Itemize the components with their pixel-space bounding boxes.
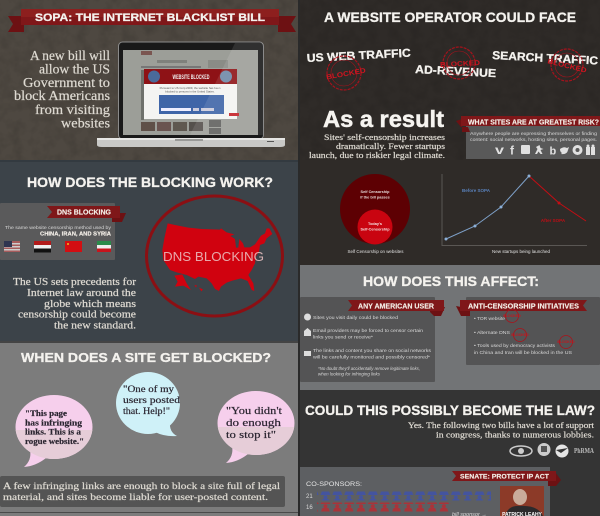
- callout: infringing links summary: material, and sites become liable for user-posted content.: [3, 492, 268, 503]
- panel: any American user: Sites you visit daily could be blocked: [313, 315, 398, 321]
- panel: DNS blocking: [0, 203, 126, 260]
- logos: lobby groups: [510, 443, 594, 458]
- text block: as a result: Sites' self-censorship increases: [324, 132, 445, 142]
- pictogram: 21 co-sponsors: [317, 492, 491, 500]
- intro text block: Government to: [23, 75, 110, 90]
- banner: any American user: [348, 300, 445, 316]
- text block: yes bills have support: Yes. The following two bills have a lot of support: [408, 420, 595, 430]
- panel: any American user: Email providers may be forced to censor certain: [313, 328, 423, 334]
- panel: operator risks background: [300, 0, 600, 265]
- text block: as a result: launch, due to riskier legal climate.: [309, 150, 445, 160]
- icons: social networks: f: [510, 144, 515, 158]
- panel: anti-censorship initiatives: • Alternate DNS: [474, 330, 510, 336]
- panel: anti-censorship initiatives: [456, 297, 600, 365]
- intro text block: websites: [61, 116, 110, 130]
- intro text block: A new bill will: [30, 48, 110, 63]
- panel: DNS blocking: CHINA, IRAN, AND SYRIA: [40, 232, 111, 238]
- panel: any American user: *No doubt they'll accidentally remove legitimate links,: [318, 366, 420, 371]
- chart: startups line chart: New startups being launched: [492, 249, 551, 254]
- speech bubble: didn't do enough: do enough: [226, 418, 282, 429]
- callout: infringing links summary: [0, 476, 285, 507]
- banner: anti-censorship initiatives: ANTI-CENSORSHIP INITIATIVES: [468, 302, 579, 310]
- laptop showing website blocked page: [97, 42, 285, 147]
- label: US web traffic with stamp: [307, 48, 411, 90]
- heading: website operator could face: A WEBSITE OPERATOR COULD FACE: [324, 9, 576, 25]
- title banner: SOPA: THE INTERNET BLACKLIST BILL: [35, 12, 265, 24]
- speech bubble: infringing links: "This page: [25, 408, 67, 418]
- heading: could this become law: COULD THIS POSSIBLY BECOME THE LAW?: [305, 402, 595, 418]
- text block: US sets precedents: globe which means: [44, 299, 136, 310]
- stamp: DNS blocked: BLOCKED: [511, 333, 529, 337]
- icons: social networks: b: [550, 146, 556, 158]
- label: US web traffic with stamp: US WEB TRAFFIC: [307, 48, 411, 65]
- chart: startups line chart: Before SOPA: [462, 188, 491, 193]
- panel: when blocked background: [0, 341, 300, 516]
- panel: intro background: [0, 0, 300, 161]
- speech bubble: users posted: "One of my: [123, 384, 174, 395]
- label: ad revenue with stamp: AD-REVENUE: [415, 64, 497, 80]
- text block: yes bills have support: [408, 420, 595, 440]
- panel: any American user: The links and content you share on social networks: [313, 348, 432, 354]
- title banner: [8, 9, 296, 32]
- heading: how does this affect: HOW DOES THIS AFFECT:: [363, 274, 539, 289]
- callout: infringing links summary: A few infringing links are enough to block a site full of legal: [3, 481, 280, 492]
- text block: as a result: As a result: [323, 106, 444, 132]
- stamp: tools blocked: BLOCKED: [557, 340, 575, 344]
- map: red United States in ring: [146, 196, 282, 316]
- panel: how blocking works background: [0, 161, 300, 341]
- stamp: TOR blocked: [503, 310, 521, 322]
- icons: social networks: [495, 143, 595, 158]
- panel: any American user: [300, 297, 445, 382]
- pictogram: 16 co-sponsors: [317, 502, 451, 512]
- icon: China flag: [65, 241, 82, 252]
- speech bubble: infringing links: links. This is a: [25, 426, 82, 436]
- intro text block: block Americans: [14, 88, 110, 103]
- intro text block: [14, 48, 110, 130]
- chart: self-censorship circles: [340, 174, 410, 254]
- panel: anti-censorship initiatives: • Tools used by democracy activists: [474, 343, 556, 349]
- banner: anti-censorship initiatives: [456, 300, 587, 316]
- panel: what sites are at greatest risk: Anywhere people are expressing themselves or finding: [470, 131, 598, 136]
- stamp: tools blocked: [557, 336, 575, 348]
- label: ad revenue with stamp: [415, 47, 497, 80]
- map: red United States in ring: DNS BLOCKING: [163, 249, 264, 264]
- speech bubble: didn't do enough: [218, 391, 294, 463]
- logos: lobby groups: PhRMA: [574, 447, 594, 455]
- speech bubble: users posted: [116, 372, 180, 436]
- speech bubble: users posted: that. Help!": [123, 407, 170, 417]
- speech bubble: infringing links: rogue website.": [25, 436, 84, 446]
- panel: what sites are at greatest risk: content: social networks, hosting sites, personal pages.: [470, 137, 597, 142]
- banner: senate protect IP act: SENATE: PROTECT IP ACT: [460, 474, 549, 480]
- panel: what sites are at greatest risk: WHAT SITES ARE AT GREATEST RISK?: [468, 120, 599, 126]
- panel: what sites are at greatest risk: [456, 116, 600, 159]
- panel: become law background: [300, 390, 600, 516]
- chart: startups line chart: After SOPA: [541, 218, 566, 223]
- speech bubble: infringing links: has infringing: [25, 418, 83, 428]
- label: search traffic with stamp: SEARCH TRAFFIC: [492, 50, 598, 68]
- panel: any American user: when looking for infringing links: [318, 372, 381, 376]
- panel: anti-censorship initiatives: in China and Iran will be blocked in the US: [474, 350, 572, 356]
- panel: any American user: will be carefully monitored and possibly censored*: [313, 354, 430, 360]
- text block: yes bills have support: in congress, thanks to numerous lobbies.: [436, 430, 594, 440]
- panel: senate protect IP act: 16: [306, 505, 313, 511]
- text block: US sets precedents: the new standard.: [54, 320, 136, 332]
- intro text block: from visiting: [35, 102, 110, 117]
- text block: US sets precedents: The US sets precedents for: [13, 277, 137, 288]
- heading: when does a site get blocked: WHEN DOES A SITE GET BLOCKED?: [21, 350, 271, 365]
- speech bubble: users posted: users posted: [123, 396, 180, 406]
- text block: US sets precedents: censorship could become: [18, 310, 137, 320]
- label: US web traffic with stamp: BLOCKED: [326, 68, 366, 81]
- panel: DNS blocking: The same website censorship method used by: [5, 225, 112, 230]
- text block: US sets precedents: Internet law around the: [27, 288, 137, 299]
- label: ad revenue with stamp: BLOCKED: [440, 60, 480, 69]
- icon: Iraq flag: [34, 241, 51, 252]
- chart: self-censorship circles: Self-Censorship: [360, 228, 390, 232]
- portrait: Patrick Leahy: [500, 486, 544, 516]
- speech bubble: didn't do enough: "You didn't: [226, 406, 282, 417]
- laptop showing website blocked page: WEBSITE BLOCKED: [172, 75, 210, 81]
- icon: US flag: [4, 241, 20, 252]
- panel: how this affects background: [300, 265, 600, 390]
- panel: anti-censorship initiatives: • TOR website: [474, 316, 505, 322]
- icon: people: [304, 351, 311, 356]
- icon: envelope: [304, 328, 311, 336]
- panel: senate protect IP act: [300, 467, 561, 516]
- text block: as a result: [309, 106, 445, 160]
- chart: self-censorship circles: Self Censorship on websites: [348, 249, 404, 254]
- chart: self-censorship circles: if the bill passes: [360, 196, 390, 200]
- speech bubble: didn't do enough: to stop it": [226, 430, 276, 441]
- icon: globe: [304, 314, 311, 320]
- heading: how does the blocking work: HOW DOES THE BLOCKING WORK?: [27, 174, 273, 190]
- banner: any American user: ANY AMERICAN USER: [358, 302, 435, 310]
- label: search traffic with stamp: [492, 49, 598, 81]
- laptop showing website blocked page: blocked to persons in the United States.: [165, 90, 215, 94]
- panel: any American user: links you send or receive*: [313, 334, 373, 340]
- text block: US sets precedents: [13, 277, 137, 332]
- intro text block: allow the US: [39, 62, 110, 76]
- panel: senate protect IP act: CO-SPONSORS:: [306, 481, 362, 488]
- laptop showing website blocked page: Pursuant to US Corp 2009, the website has been: [160, 86, 221, 90]
- chart: startups line chart: [442, 174, 587, 254]
- stamp: TOR blocked: BLOCKED: [503, 314, 521, 318]
- text block: as a result: dramatically. Fewer startups: [336, 141, 445, 151]
- banner: senate protect IP act: [452, 471, 561, 486]
- banner: DNS blocking: DNS BLOCKING: [57, 210, 112, 216]
- chart: self-censorship circles: Self Censorship: [361, 190, 390, 194]
- speech bubble: infringing links: [16, 395, 92, 467]
- stamp: DNS blocked: [511, 328, 529, 342]
- panel: senate protect IP act: 21: [306, 494, 313, 500]
- label: search traffic with stamp: BLOCKED: [547, 58, 587, 75]
- icons: social networks: v: [495, 143, 504, 157]
- chart: self-censorship circles: Today's: [368, 222, 382, 226]
- icon: Iran flag: [97, 241, 111, 252]
